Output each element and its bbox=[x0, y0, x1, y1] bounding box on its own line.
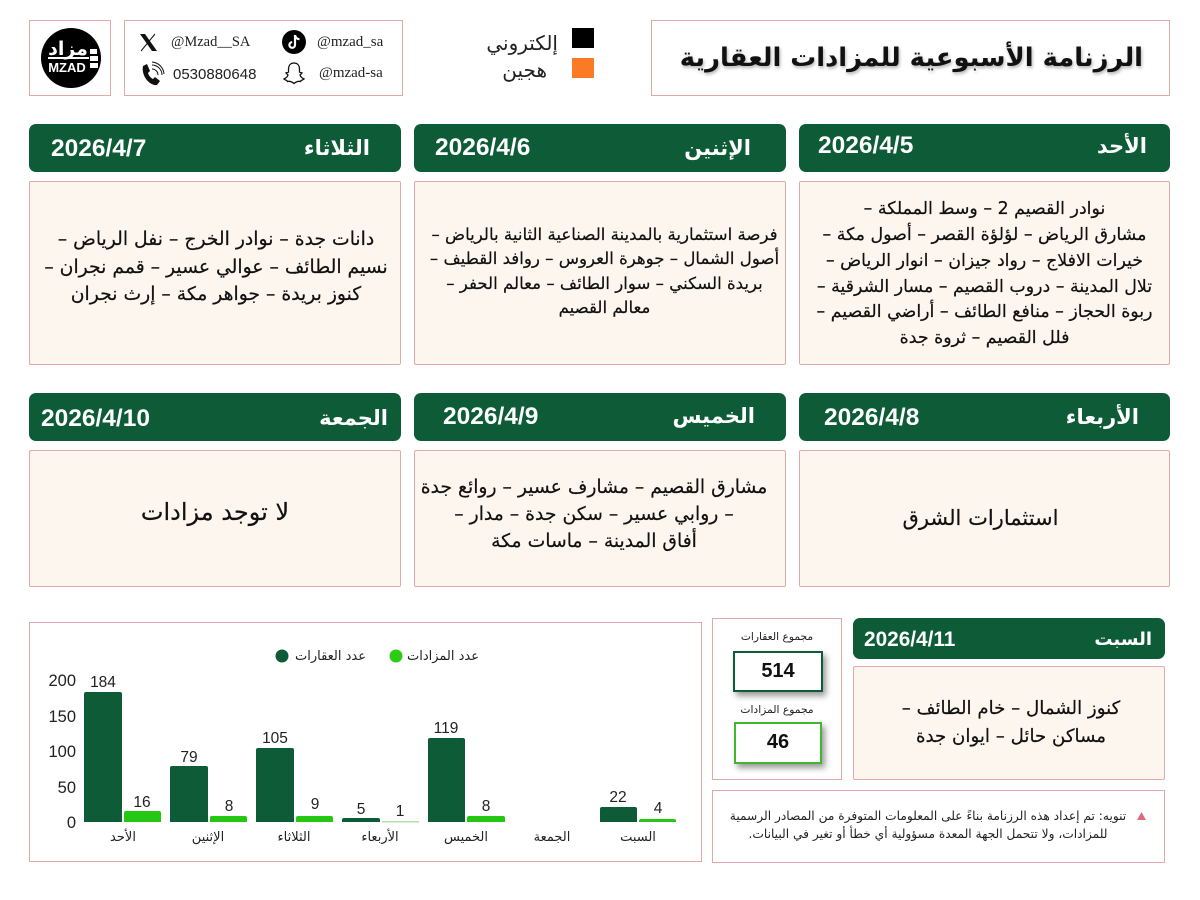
value labels: 184 bbox=[90, 674, 116, 690]
title bbox=[651, 20, 1170, 96]
icon: phone bbox=[142, 62, 164, 86]
day labels: الإثنين bbox=[191, 830, 224, 844]
panel: Monday auctions: معالم القصيم bbox=[559, 298, 650, 317]
legend item: electronic bbox=[486, 28, 594, 55]
header: Saturday: السبت bbox=[1094, 629, 1152, 650]
icon: Mzad logo: مزاد bbox=[48, 38, 88, 60]
panel: Wednesday auctions: استثمارات الشرق bbox=[903, 506, 1058, 530]
panel: Tuesday auctions bbox=[29, 181, 401, 365]
day labels: الأحد bbox=[110, 828, 135, 844]
y axis labels: 150 bbox=[48, 708, 76, 726]
panel: Thursday auctions: – روابي عسير – سكن جدة – مدار – bbox=[454, 504, 734, 525]
properties bars bbox=[84, 692, 636, 822]
panel: Sunday auctions: خيرات الافلاج – رواد جيزان – انوار الرياض – bbox=[826, 251, 1143, 271]
value labels bbox=[90, 674, 662, 820]
header: Tuesday: 2026/4/7 bbox=[51, 135, 146, 162]
panel: Thursday auctions bbox=[414, 450, 786, 587]
header: Saturday bbox=[853, 618, 1165, 659]
label: total auctions: مجموع المزادات bbox=[740, 703, 814, 716]
value labels: 5 bbox=[356, 800, 365, 818]
panel: Saturday auctions bbox=[853, 666, 1165, 780]
header: Monday: 2026/4/6 bbox=[435, 134, 530, 161]
day labels: الجمعة bbox=[533, 830, 570, 844]
y axis labels: 200 bbox=[48, 672, 76, 690]
panel: Wednesday auctions bbox=[799, 450, 1170, 587]
panel: Monday auctions bbox=[414, 181, 786, 365]
header: Tuesday: الثلاثاء bbox=[304, 136, 370, 160]
panel: Sunday auctions: ربوة الحجاز – منافع الطائف – أراضي القصيم – bbox=[816, 302, 1153, 322]
legend item: hybrid bbox=[502, 58, 594, 82]
text: disclaimer bbox=[730, 809, 1126, 841]
panel: Saturday auctions: مساكن حائل – ايوان جدة bbox=[916, 726, 1106, 747]
icon: Mzad logo bbox=[41, 28, 101, 88]
chart legend: عدد العقارات bbox=[294, 648, 366, 664]
legend: auction types bbox=[486, 28, 594, 82]
y axis labels bbox=[48, 672, 76, 832]
header: Wednesday: 2026/4/8 bbox=[824, 404, 919, 431]
y axis labels: 0 bbox=[66, 814, 76, 832]
panel: Tuesday auctions: نسيم الطائف – عوالي عسير – قمم نجران – bbox=[44, 257, 388, 278]
header: Wednesday: الأربعاء bbox=[1066, 405, 1139, 429]
legend item: electronic: إلكتروني bbox=[486, 31, 558, 55]
icon: Snapchat bbox=[283, 62, 305, 84]
value labels: 105 bbox=[262, 730, 287, 746]
stat: total properties: 514 bbox=[761, 660, 795, 682]
text: X handle: @Mzad__SA bbox=[171, 34, 250, 50]
icon: Mzad logo: MZAD bbox=[48, 60, 86, 75]
header: Thursday: الخميس bbox=[672, 404, 755, 428]
legend item: hybrid: هجين bbox=[502, 58, 547, 82]
panel: Thursday auctions: مشارق القصيم – مشارف عسير – روائع جدة bbox=[421, 477, 767, 498]
header: Friday: 2026/4/10 bbox=[41, 405, 150, 432]
stat: total auctions bbox=[734, 722, 822, 764]
header: Sunday: الأحد bbox=[1097, 134, 1147, 158]
panel: Tuesday auctions: دانات جدة – نوادر الخرج – نفل الرياض – bbox=[58, 229, 374, 250]
panel: Sunday auctions bbox=[799, 181, 1170, 365]
value labels: 16 bbox=[133, 794, 150, 810]
value labels: 8 bbox=[481, 798, 490, 814]
text: disclaimer: للمزادات، ولا تتحمل الجهة المعدة مسؤولية أي خطأ أو تغير في البيانات. bbox=[749, 827, 1107, 841]
value labels: 22 bbox=[609, 788, 626, 806]
bar chart: properties and auctions per day bbox=[29, 622, 702, 862]
panel: Friday auctions bbox=[29, 450, 401, 587]
header: Thursday bbox=[414, 393, 786, 441]
stat: total properties bbox=[733, 651, 823, 692]
panel: Saturday auctions: كنوز الشمال – خام الطائف – bbox=[902, 698, 1120, 719]
panel: Sunday auctions: مشارق الرياض – لؤلؤة القصر – أصول مكة – bbox=[823, 225, 1146, 245]
value labels: 119 bbox=[433, 720, 458, 736]
header: Sunday: 2026/4/5 bbox=[818, 132, 913, 159]
icon: warning triangle bbox=[1137, 812, 1146, 820]
day labels: الثلاثاء bbox=[277, 830, 310, 844]
value labels: 4 bbox=[653, 800, 662, 816]
header: Wednesday bbox=[799, 393, 1170, 441]
value labels: 79 bbox=[180, 748, 197, 766]
day labels: الأربعاء bbox=[361, 828, 398, 844]
day labels bbox=[110, 828, 655, 844]
text: TikTok handle: @mzad_sa bbox=[317, 34, 383, 50]
y axis labels: 100 bbox=[48, 742, 76, 760]
value labels: 8 bbox=[224, 798, 233, 814]
panel: Tuesday auctions: كنوز بريدة – جواهر مكة – إرث نجران bbox=[71, 284, 361, 305]
chart legend bbox=[275, 648, 478, 664]
header: Tuesday bbox=[29, 124, 401, 172]
panel: disclaimer bbox=[712, 790, 1165, 863]
header: Monday bbox=[414, 124, 786, 172]
header: Saturday: 2026/4/11 bbox=[864, 628, 955, 651]
panel: Friday auctions: لا توجد مزادات bbox=[141, 498, 289, 526]
panel: Sunday auctions: تلال المدينة – دروب القصيم – مسار الشرقية – bbox=[817, 276, 1152, 296]
panel: Sunday auctions: فلل القصيم – ثروة جدة bbox=[900, 328, 1069, 348]
panel: Monday auctions: فرصة استثمارية بالمدينة الصناعية الثانية بالرياض – bbox=[431, 225, 778, 244]
panel: Monday auctions: أصول الشمال – جوهرة العروس – روافد القطيف – bbox=[430, 249, 779, 268]
panel: totals bbox=[712, 618, 842, 780]
panel: logo bbox=[29, 20, 111, 96]
header: Friday bbox=[29, 393, 401, 441]
day labels: الخميس bbox=[444, 830, 487, 844]
value labels: 9 bbox=[310, 796, 319, 812]
icon: X bbox=[140, 34, 157, 52]
title: الرزنامة الأسبوعية للمزادات العقارية bbox=[680, 43, 1143, 73]
text: disclaimer: تنويه: تم إعداد هذه الرزنامة بناءً على المعلومات المتوفرة من المصادر الرسمية bbox=[730, 809, 1126, 823]
auctions bars bbox=[124, 810, 676, 822]
day labels: السبت bbox=[620, 830, 655, 844]
panel: Thursday auctions: أفاق المدينة – ماسات مكة bbox=[491, 531, 697, 552]
text: Snapchat handle: @mzad-sa bbox=[319, 65, 383, 81]
value labels: 1 bbox=[395, 802, 404, 820]
y axis labels: 50 bbox=[57, 778, 76, 796]
label: total properties: مجموع العقارات bbox=[741, 630, 813, 643]
stat: total auctions: 46 bbox=[767, 731, 789, 753]
panel: social contacts bbox=[124, 20, 403, 96]
panel: Sunday auctions: نوادر القصيم 2 – وسط المملكة – bbox=[864, 199, 1105, 219]
text: phone number: 0530880648 bbox=[173, 66, 256, 83]
header: Friday: الجمعة bbox=[319, 406, 388, 430]
header: Monday: الإثنين bbox=[684, 136, 751, 160]
chart legend: عدد المزادات bbox=[406, 648, 478, 664]
panel: Monday auctions: بريدة السكني – سوار الطائف – معالم الحفر – bbox=[446, 274, 763, 292]
header: Sunday bbox=[799, 124, 1170, 172]
icon: TikTok bbox=[282, 30, 306, 54]
header: Thursday: 2026/4/9 bbox=[443, 403, 538, 430]
